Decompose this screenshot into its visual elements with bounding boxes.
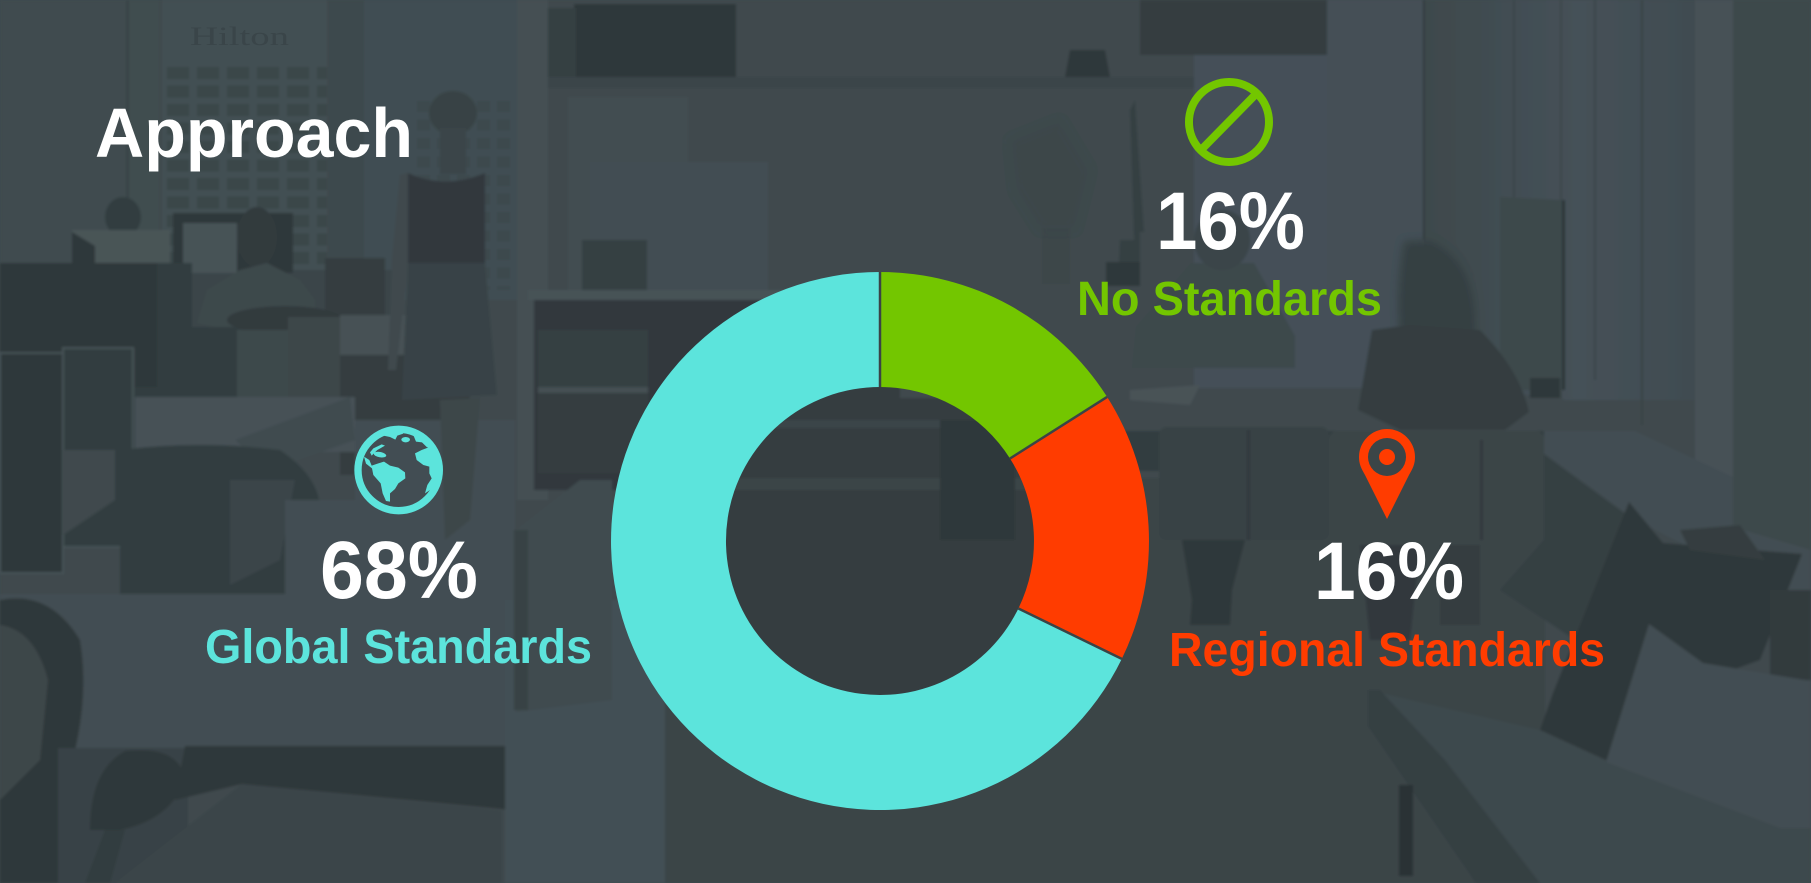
sill — [1544, 431, 1811, 610]
man and woman at table — [1132, 263, 1295, 368]
segment separators — [880, 272, 1122, 659]
icon: globe — [358, 428, 439, 511]
segment: global standards 68% — [611, 272, 1122, 810]
icon: no-standards prohibition sign — [1189, 82, 1269, 162]
stat: 68% global standards: 68% — [320, 525, 478, 616]
standing woman — [429, 91, 477, 135]
stat: 16% no standards: 16% — [1156, 176, 1305, 267]
label: global standards: Global Standards — [205, 621, 592, 674]
icon: map pin — [1359, 429, 1415, 519]
label: no standards: No Standards — [1077, 273, 1382, 326]
segment: regional standards 16% — [1010, 397, 1149, 659]
centre and floor — [700, 370, 1060, 490]
label: regional standards: Regional Standards — [1169, 624, 1605, 677]
stat: 16% regional standards: 16% — [1314, 526, 1464, 617]
left office — [0, 270, 400, 340]
chairs — [1159, 427, 1329, 540]
donut chart — [611, 272, 1149, 810]
title: Approach — [95, 94, 413, 172]
segment: no standards 16% — [880, 272, 1107, 458]
pillows — [1540, 502, 1802, 762]
bench — [1368, 690, 1811, 883]
sign text in background photo: Hilton — [190, 22, 289, 51]
